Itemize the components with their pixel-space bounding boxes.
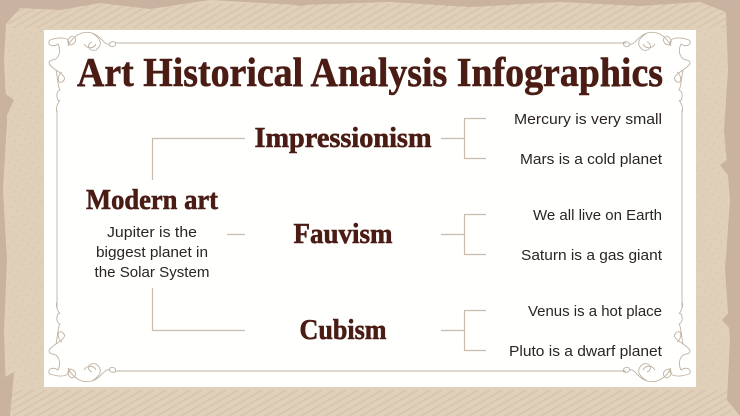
heading: Fauvism: Fauvism xyxy=(294,219,392,250)
item: Mars is a cold planet xyxy=(520,152,662,168)
central topic: Modern art xyxy=(86,185,219,281)
ornament: bottom left corner xyxy=(49,302,117,382)
bracket xyxy=(441,118,486,158)
branch: Impressionism xyxy=(254,112,662,168)
heading: Impressionism: Impressionism xyxy=(254,123,432,154)
heading: Modern art: Modern art xyxy=(86,185,219,216)
ornamental frame xyxy=(49,32,690,382)
heading: Cubism: Cubism xyxy=(300,315,386,346)
bracket xyxy=(441,310,486,350)
item: Pluto is a dwarf planet xyxy=(509,344,662,360)
white panel xyxy=(44,30,696,387)
description: Jupiter is the xyxy=(107,225,197,241)
ornament: top left corner xyxy=(49,32,117,112)
branch: Fauvism xyxy=(294,208,662,264)
central topic: Modern art: biggest planet in xyxy=(96,245,208,261)
ornament: top right corner xyxy=(622,32,690,112)
bracket xyxy=(441,214,486,254)
central topic: Modern art: the Solar System xyxy=(94,265,210,281)
item: Venus is a hot place xyxy=(528,304,662,320)
ornament: bottom right corner xyxy=(622,302,690,382)
connectors from Modern art to movements xyxy=(152,138,245,330)
item: We all live on Earth xyxy=(533,208,662,224)
item: Saturn is a gas giant xyxy=(521,248,662,264)
item: Mercury is very small xyxy=(514,112,662,128)
title: Art Historical Analysis Infographics xyxy=(77,49,663,95)
branch: Cubism xyxy=(300,304,662,360)
